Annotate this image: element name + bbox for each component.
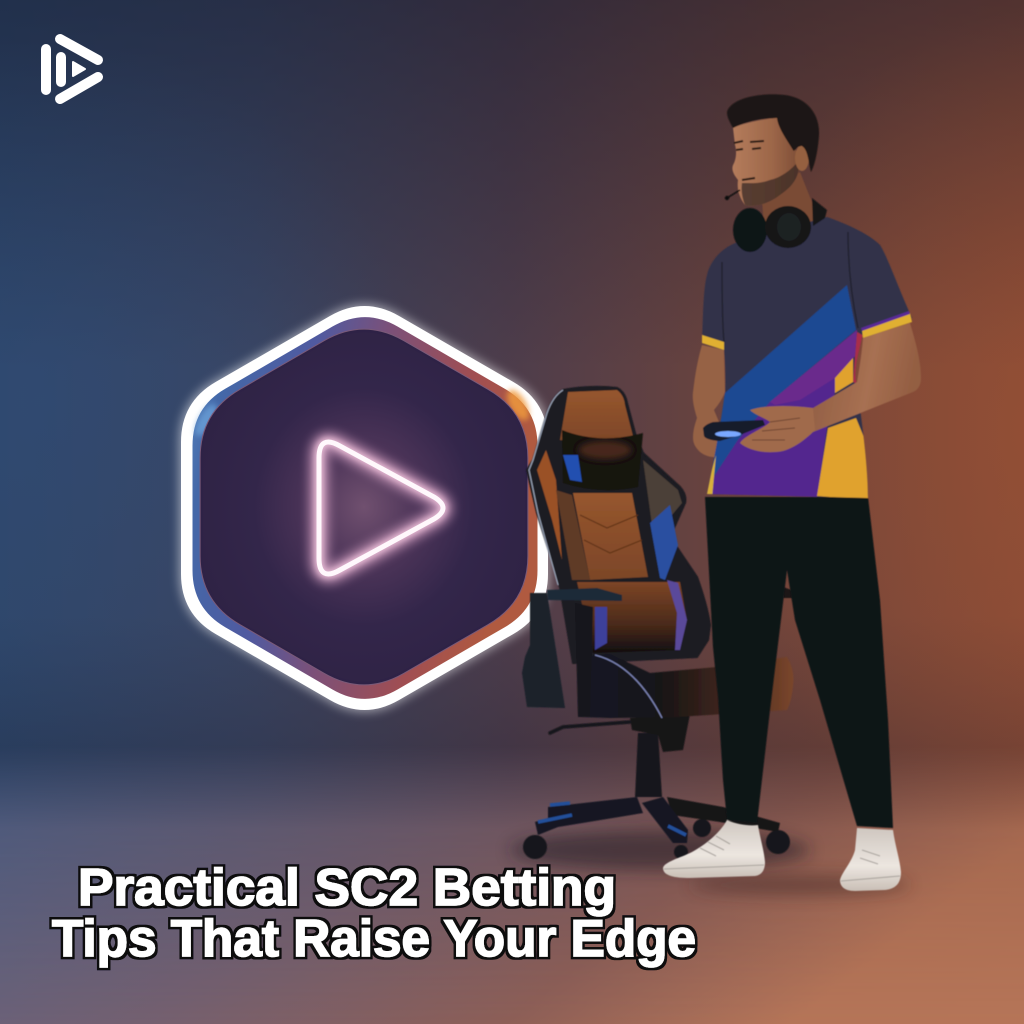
white neon ring <box>181 306 548 710</box>
chevron stitching <box>580 515 642 553</box>
seat piping <box>595 655 662 718</box>
title <box>52 859 696 968</box>
right hand <box>740 406 815 452</box>
left hem accent <box>706 455 717 495</box>
shirt body <box>702 217 912 498</box>
outer glow <box>179 304 550 712</box>
sleeve trim right <box>862 313 912 338</box>
left brown strip <box>556 490 590 580</box>
right sneaker <box>840 828 901 891</box>
left side mechanism <box>522 593 565 708</box>
lumbar cushion <box>577 582 687 653</box>
shirt red side <box>852 332 864 384</box>
shirt blue stripe <box>712 284 856 476</box>
neon play triangle <box>319 442 443 574</box>
shirt orange panels <box>817 358 870 500</box>
hexagon neon play badge <box>179 304 550 712</box>
title: Practical SC2 Betting <box>78 859 616 917</box>
pillow sheen <box>579 441 631 459</box>
chair side orange glow <box>537 450 562 560</box>
icon: brand play logo <box>41 39 98 99</box>
chair base and casters <box>523 797 790 859</box>
chair tilt mechanism <box>630 714 690 752</box>
tilt lever <box>550 722 630 733</box>
headphones <box>733 198 827 252</box>
pillow <box>562 430 643 490</box>
shirt colour stripes <box>700 232 870 500</box>
hair <box>727 94 819 172</box>
chair back shell <box>527 387 710 663</box>
chair piping <box>529 390 563 585</box>
sleeve seam <box>722 232 858 342</box>
blue rim highlight <box>191 401 221 439</box>
chair back centre panel <box>573 493 648 580</box>
eyes and brows <box>734 141 764 180</box>
ear <box>795 145 809 171</box>
chair headrest panel <box>560 390 634 445</box>
dark inner panel <box>203 332 525 682</box>
pants <box>705 497 893 828</box>
person holding controller <box>663 94 921 891</box>
chair side panel grey <box>643 460 682 525</box>
head and face <box>732 118 800 206</box>
shirt purple stripe <box>712 378 836 498</box>
lumbar blue band <box>595 607 607 650</box>
back right armrest <box>783 587 797 598</box>
beard <box>742 160 799 206</box>
lumbar purple band <box>667 580 687 650</box>
gaming chair <box>522 387 797 859</box>
arm post <box>575 603 593 717</box>
headset microphone <box>725 190 740 200</box>
left arm <box>693 345 730 457</box>
inner bevel <box>200 329 528 685</box>
right sneaker sole and laces <box>841 850 900 881</box>
chair blue side panel <box>650 505 678 580</box>
left sneaker laces <box>664 836 764 869</box>
sleeve trim left <box>702 335 724 350</box>
neck <box>762 172 815 240</box>
metallic rim <box>193 317 537 699</box>
right arm <box>813 323 921 432</box>
pillow blue patch <box>563 455 582 482</box>
armrest pad <box>547 588 622 601</box>
title: Tips That Raise Your Edge <box>52 910 696 968</box>
controller <box>703 420 765 441</box>
finger creases <box>752 418 800 440</box>
left sneaker <box>663 820 765 878</box>
seat <box>580 654 793 718</box>
play icon glow <box>319 442 443 574</box>
orange rim highlight <box>503 386 533 424</box>
chair column <box>635 733 662 797</box>
